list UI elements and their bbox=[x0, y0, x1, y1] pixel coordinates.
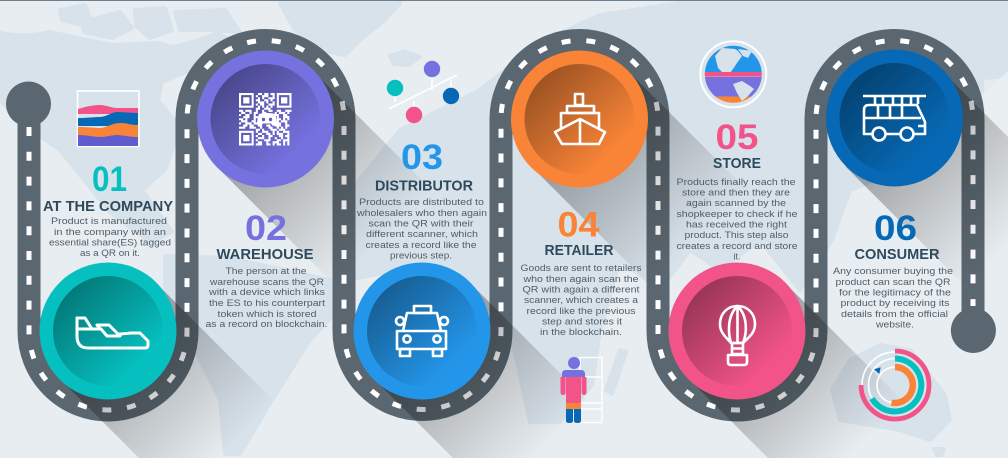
text block 04: record like the previous bbox=[526, 306, 636, 317]
circle badge 05 bbox=[668, 262, 806, 400]
number 05: 05 bbox=[716, 118, 758, 157]
number 03: 03 bbox=[401, 138, 443, 177]
text block 04: in the blockchain. bbox=[540, 327, 622, 338]
text block 04 bbox=[520, 263, 642, 338]
panel: step 05 store bbox=[668, 41, 806, 400]
text block 06: product can scan the QR bbox=[836, 277, 951, 288]
number 06: 06 bbox=[874, 209, 917, 248]
text block 02: the ES to his counterpart bbox=[209, 298, 325, 309]
icon: globe bbox=[700, 41, 767, 107]
text block 06: for the legitimacy of the bbox=[839, 288, 951, 298]
icon: airplane bbox=[77, 318, 148, 348]
text block 01 bbox=[49, 216, 171, 259]
icon: hot air balloon bbox=[720, 306, 755, 365]
text block 03: previous step. bbox=[390, 250, 452, 262]
panel: step 01 at the company bbox=[40, 91, 176, 400]
text block 03: different scanner, which bbox=[366, 229, 478, 240]
text block 05: creates a record and store bbox=[676, 241, 798, 252]
long shadows bbox=[60, 71, 1008, 458]
icon: connected nodes bbox=[387, 61, 459, 123]
text block 03: wholesalers who then again bbox=[356, 208, 487, 219]
text block 05: product. This step also bbox=[684, 230, 788, 241]
text block 01: in the company with an bbox=[54, 227, 166, 238]
panel: step 06 consumer bbox=[826, 50, 963, 419]
text block 06: product by receiving its bbox=[840, 298, 950, 309]
heading: retailer: RETAILER bbox=[544, 242, 614, 259]
icon: taxi bbox=[396, 306, 448, 356]
text block 05 bbox=[676, 177, 798, 262]
heading: store: STORE bbox=[713, 155, 761, 172]
text block 05: Products finally reach the bbox=[676, 177, 796, 188]
text block 06: details from the official bbox=[841, 309, 948, 320]
icon: stacked area chart bbox=[78, 91, 139, 146]
number 02: 02 bbox=[245, 209, 287, 248]
icon: person with door bbox=[560, 357, 602, 423]
circle badge 02 bbox=[197, 50, 334, 188]
heading: consumer: CONSUMER bbox=[854, 246, 940, 263]
text block 04: who then again scan the bbox=[522, 274, 638, 285]
number 01: 01 bbox=[92, 160, 127, 199]
text block 02: with a device which links bbox=[208, 287, 325, 298]
heading: distributor: DISTRIBUTOR bbox=[375, 178, 473, 194]
icon: discord logo in QR bbox=[257, 113, 277, 126]
text block 02: token which is stored bbox=[218, 309, 316, 320]
number 04: 04 bbox=[558, 206, 600, 244]
circle badge 04 bbox=[511, 50, 648, 188]
panel: step 02 warehouse bbox=[197, 50, 334, 330]
heading: at the company: AT THE COMPANY bbox=[43, 198, 173, 215]
text block 01: Product is manufactured bbox=[51, 216, 167, 227]
panel: step 04 retailer bbox=[511, 50, 648, 423]
text block 05: has received the right bbox=[686, 220, 787, 230]
text block 05: it. bbox=[734, 252, 740, 262]
text block 06: website. bbox=[875, 320, 914, 330]
text block 02: warehouse scans the QR bbox=[209, 277, 324, 288]
text block 01: as a QR on it. bbox=[80, 248, 140, 259]
text block 02 bbox=[206, 266, 328, 330]
text block 04: Goods are sent to retailers bbox=[520, 263, 642, 274]
text block 04: scanner, which creates a bbox=[524, 295, 639, 306]
text block 05: store and then they are bbox=[682, 188, 790, 198]
text block 04: QR with again a different bbox=[522, 284, 640, 296]
circle badge 03 bbox=[354, 262, 490, 400]
text block 05: shopkeeper to check if he bbox=[676, 209, 798, 220]
circle badge 06 bbox=[826, 50, 963, 186]
text block 03: scan the QR with their bbox=[368, 218, 474, 230]
text block 03: creates a record like the bbox=[366, 240, 476, 251]
heading: warehouse: WAREHOUSE bbox=[216, 246, 314, 263]
icon: QR code bbox=[239, 94, 292, 144]
road bbox=[6, 41, 996, 410]
text block 04: step and stores it bbox=[542, 316, 622, 328]
text block 02: as a record on blockchain. bbox=[206, 319, 328, 330]
icon: radial chart bbox=[861, 351, 929, 419]
panel: step 03 distributor bbox=[354, 61, 490, 400]
icon: bus bbox=[863, 96, 926, 140]
text block 01: essential share(ES) tagged bbox=[49, 238, 171, 248]
icon: ship bbox=[555, 94, 605, 144]
circle badge 01 bbox=[40, 262, 176, 400]
text block 06: Any consumer buying the bbox=[833, 266, 953, 277]
text block 02: The person at the bbox=[226, 266, 306, 277]
text block 06 bbox=[833, 266, 953, 330]
text block 03 bbox=[356, 197, 487, 262]
text block 03: Products are distributed to bbox=[359, 197, 484, 208]
text block 05: again scanned by the bbox=[686, 198, 786, 209]
